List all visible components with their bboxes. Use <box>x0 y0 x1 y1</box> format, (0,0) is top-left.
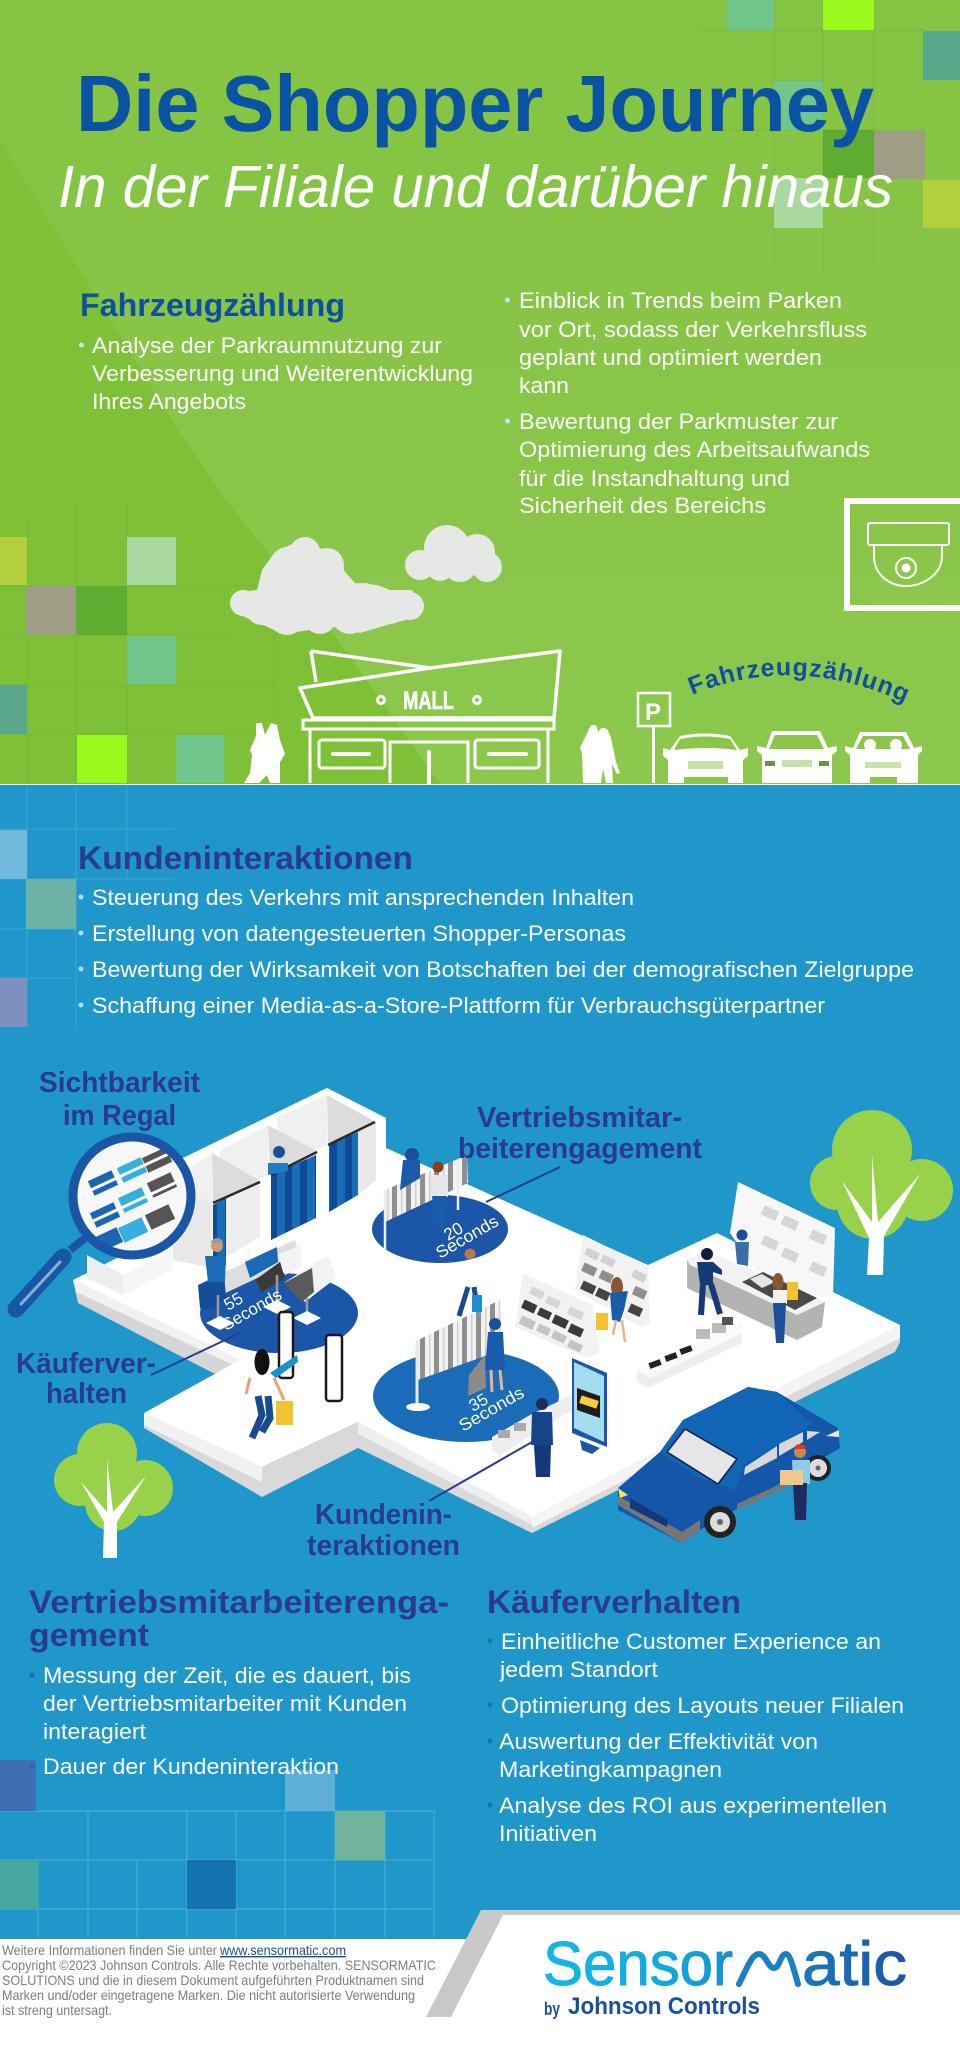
curved label: Fahrzeugzählung: Fahrzeugzählung <box>688 661 908 705</box>
heading: Fahrzeugzählung: Fahrzeugzählung <box>80 287 345 323</box>
text block: sales associate bullets: interagiert <box>43 1719 146 1744</box>
icon: car one <box>663 734 748 783</box>
footer legal text: Copyright ©2023 Johnson Controls. Alle Rechte vorbehalten. SENSORMATIC <box>2 1957 436 1973</box>
label: Kundeninteraktionen: teraktionen <box>307 1530 460 1562</box>
footer legal text: www.sensormatic.com <box>219 1942 346 1958</box>
text block: shopper behaviour bullets <box>488 1629 904 1846</box>
label: Käuferverhalten: halten <box>46 1378 127 1410</box>
text block: shopper behaviour bullets: Optimierung des Layouts neuer Filialen <box>501 1693 904 1718</box>
floor top surface <box>73 1088 900 1517</box>
text block: shopper behaviour bullets: Initiativen <box>499 1821 597 1846</box>
text block: vehicle counting right bullets: geplant und optimiert werden <box>519 345 822 370</box>
label: Sichtbarkeit im Regal: im Regal <box>63 1100 176 1132</box>
panel: green parking section background <box>0 0 960 784</box>
icon: small cloud <box>405 525 502 582</box>
label: Kundeninteraktionen <box>307 1499 460 1562</box>
text block: vehicle counting left bullet <box>79 333 473 414</box>
clothing racks <box>198 1155 502 1411</box>
text block: vehicle counting left bullet: Analyse der Parkraumnutzung zur <box>92 333 442 358</box>
title: Die Shopper Journey <box>76 59 875 148</box>
zone times <box>218 1212 527 1435</box>
text block: vehicle counting right bullets: für die Instandhaltung und <box>519 466 790 491</box>
curtains <box>213 1122 375 1272</box>
text block: vehicle counting right bullets: Einblick in Trends beim Parken <box>519 288 842 313</box>
text block: customer interactions bullets: Bewertung der Wirksamkeit von Botschaften bei der demografischen Zielgruppe <box>92 957 914 982</box>
shelf units <box>492 1182 835 1455</box>
subtitle: In der Filiale und darüber hinaus <box>58 154 893 220</box>
person: woman in hijab <box>400 1148 420 1190</box>
label: Käuferverhalten: Käuferver- <box>16 1348 156 1380</box>
text block: vehicle counting right bullets: Sicherheit des Bereichs <box>519 493 766 518</box>
decorative squares: top right <box>676 0 960 270</box>
decorative squares: lower left of green panel <box>0 500 274 784</box>
person: man in dark suit <box>531 1398 553 1477</box>
timer zones <box>200 1195 559 1442</box>
text block: shopper behaviour bullets: jedem Standort <box>499 1657 658 1682</box>
footer legal text: ist streng untersagt. <box>2 2002 112 2018</box>
heading: Käuferverhalten: Käuferverhalten <box>487 1584 741 1620</box>
text block: sales associate bullets: Dauer der Kundeninteraktion <box>43 1754 339 1779</box>
security gates <box>279 1312 342 1401</box>
text block: vehicle counting right bullets: kann <box>519 373 569 398</box>
logo: Sensormatic by Johnson Controls: Johnson Controls <box>568 1993 760 2020</box>
text block: sales associate bullets: der Vertriebsmitarbeiter mit Kunden <box>43 1691 407 1716</box>
text block: customer interactions bullets: Erstellung von datengesteuerten Shopper-Personas <box>92 921 626 946</box>
text block: shopper behaviour bullets: Analyse des ROI aus experimentellen <box>499 1793 887 1818</box>
person: man at counter <box>697 1248 722 1315</box>
logo: Sensormatic by Johnson Controls: Sensor <box>543 1930 733 1999</box>
icon: right tree <box>810 1110 953 1275</box>
label: Käuferverhalten <box>16 1348 156 1410</box>
person: man at rack <box>430 1162 448 1228</box>
person: bearded man at fitting room <box>205 1238 226 1282</box>
text block: shopper behaviour bullets: Einheitliche Customer Experience an <box>501 1629 881 1654</box>
decorative squares: blue lower left <box>0 1760 434 1938</box>
heading: Vertriebsmitarbeiterengagement: Vertriebsmitarbeiterenga- <box>29 1584 449 1620</box>
text block: shopper behaviour bullets: Marketingkampagnen <box>499 1757 722 1782</box>
heading: Vertriebsmitarbeiterengagement <box>29 1584 449 1653</box>
icon: walking family silhouette <box>244 723 285 783</box>
text block: vehicle counting right bullets: vor Ort, sodass der Verkehrsfluss <box>519 317 867 342</box>
footer divider: grey slanted band <box>426 1910 960 2017</box>
icon: mall building <box>300 651 560 783</box>
fitting room walls <box>172 1088 386 1280</box>
person: delivery man with box <box>780 1444 810 1520</box>
callout leader lines <box>151 1167 560 1501</box>
footer legal text: Weitere Informationen finden Sie unter <box>2 1942 217 1958</box>
person: woman in fitting room <box>268 1146 288 1175</box>
text block: vehicle counting left bullet: Ihres Angebots <box>92 389 246 414</box>
label: Vertriebsmitarbeiterengagement: beiterengagement <box>458 1133 702 1165</box>
label: Sichtbarkeit im Regal: Sichtbarkeit <box>39 1067 200 1099</box>
icon: security camera in frame <box>847 501 960 608</box>
illustration: blue delivery car <box>618 1387 840 1543</box>
person: woman with yellow bag <box>772 1273 798 1343</box>
text block: customer interactions bullets: Schaffung einer Media-as-a-Store-Plattform für Verbrauchsgüterpartner <box>92 993 825 1018</box>
zone times: Seconds <box>218 1285 285 1334</box>
label: Vertriebsmitarbeiterengagement <box>458 1102 702 1165</box>
text block: shopper behaviour bullets: Auswertung der Effektivität von <box>499 1729 818 1754</box>
panel: blue store section background <box>0 785 960 1939</box>
person: woman with shopping bag <box>246 1349 298 1438</box>
footer legal text: Marken und/oder eingetragene Marken. Die nicht autorisierte Verwendung <box>2 1987 415 2003</box>
digital signage kiosk <box>572 1358 607 1454</box>
illustration: isometric store floor <box>73 1088 900 1533</box>
label: Sichtbarkeit im Regal <box>39 1067 200 1132</box>
footer legal text: SOLUTIONS und die in diesem Dokument aufgeführten Produktnamen sind <box>2 1972 424 1988</box>
icon: large cloud <box>230 537 424 635</box>
zone times: 20 <box>440 1219 466 1244</box>
text block: customer interactions bullets: Steuerung des Verkehrs mit ansprechenden Inhalten <box>92 885 634 910</box>
zone times: Seconds <box>432 1212 502 1262</box>
icon: left tree <box>54 1423 173 1558</box>
label: Vertriebsmitarbeiterengagement: Vertriebsmitar- <box>477 1102 682 1134</box>
checkout counter <box>687 1250 825 1340</box>
decorative squares: blue upper left <box>0 785 174 1027</box>
zone times: 35 <box>466 1390 491 1415</box>
icon: mall building: MALL <box>403 687 454 715</box>
text block: sales associate bullets <box>30 1663 411 1779</box>
text block: sales associate bullets: Messung der Zeit, die es dauert, bis <box>43 1663 411 1688</box>
text block: customer interactions bullets <box>78 885 914 1018</box>
footer legal text <box>2 1942 436 2018</box>
icon: parking sign: P <box>645 699 661 726</box>
zone times: Seconds <box>456 1383 527 1435</box>
icon: couple silhouette <box>580 725 620 783</box>
person: woman at shelf <box>596 1277 628 1342</box>
low block under magnifier <box>87 1250 172 1295</box>
label: Kundeninteraktionen: Kundenin- <box>315 1499 452 1531</box>
person: cashier <box>735 1230 749 1266</box>
person: man walking with bag <box>459 1248 482 1316</box>
logo: Sensormatic by Johnson Controls: by <box>544 1999 560 2019</box>
text block: vehicle counting left bullet: Verbesserung und Weiterentwicklung <box>92 361 473 386</box>
heading: Kundeninteraktionen: Kundeninteraktionen <box>78 840 413 876</box>
icon: magnifying glass over shelves <box>16 1137 191 1309</box>
heading: Vertriebsmitarbeiterengagement: gement <box>29 1617 149 1653</box>
text block: vehicle counting right bullets: Bewertung der Parkmuster zur <box>519 409 838 434</box>
logo: Sensormatic by Johnson Controls: atic <box>802 1930 907 1999</box>
person: woman in blue dress <box>485 1318 505 1392</box>
text block: vehicle counting right bullets: Optimierung des Arbeitsaufwands <box>519 437 870 462</box>
icon: parking sign <box>638 693 670 783</box>
logo: Sensormatic by Johnson Controls <box>543 1930 907 2020</box>
zone times: 55 <box>220 1289 246 1314</box>
people in store <box>205 1146 798 1477</box>
floor side faces <box>73 1280 900 1533</box>
icon: car two <box>757 731 837 783</box>
icon: car three <box>845 732 922 783</box>
text block: vehicle counting right bullets <box>505 288 870 518</box>
